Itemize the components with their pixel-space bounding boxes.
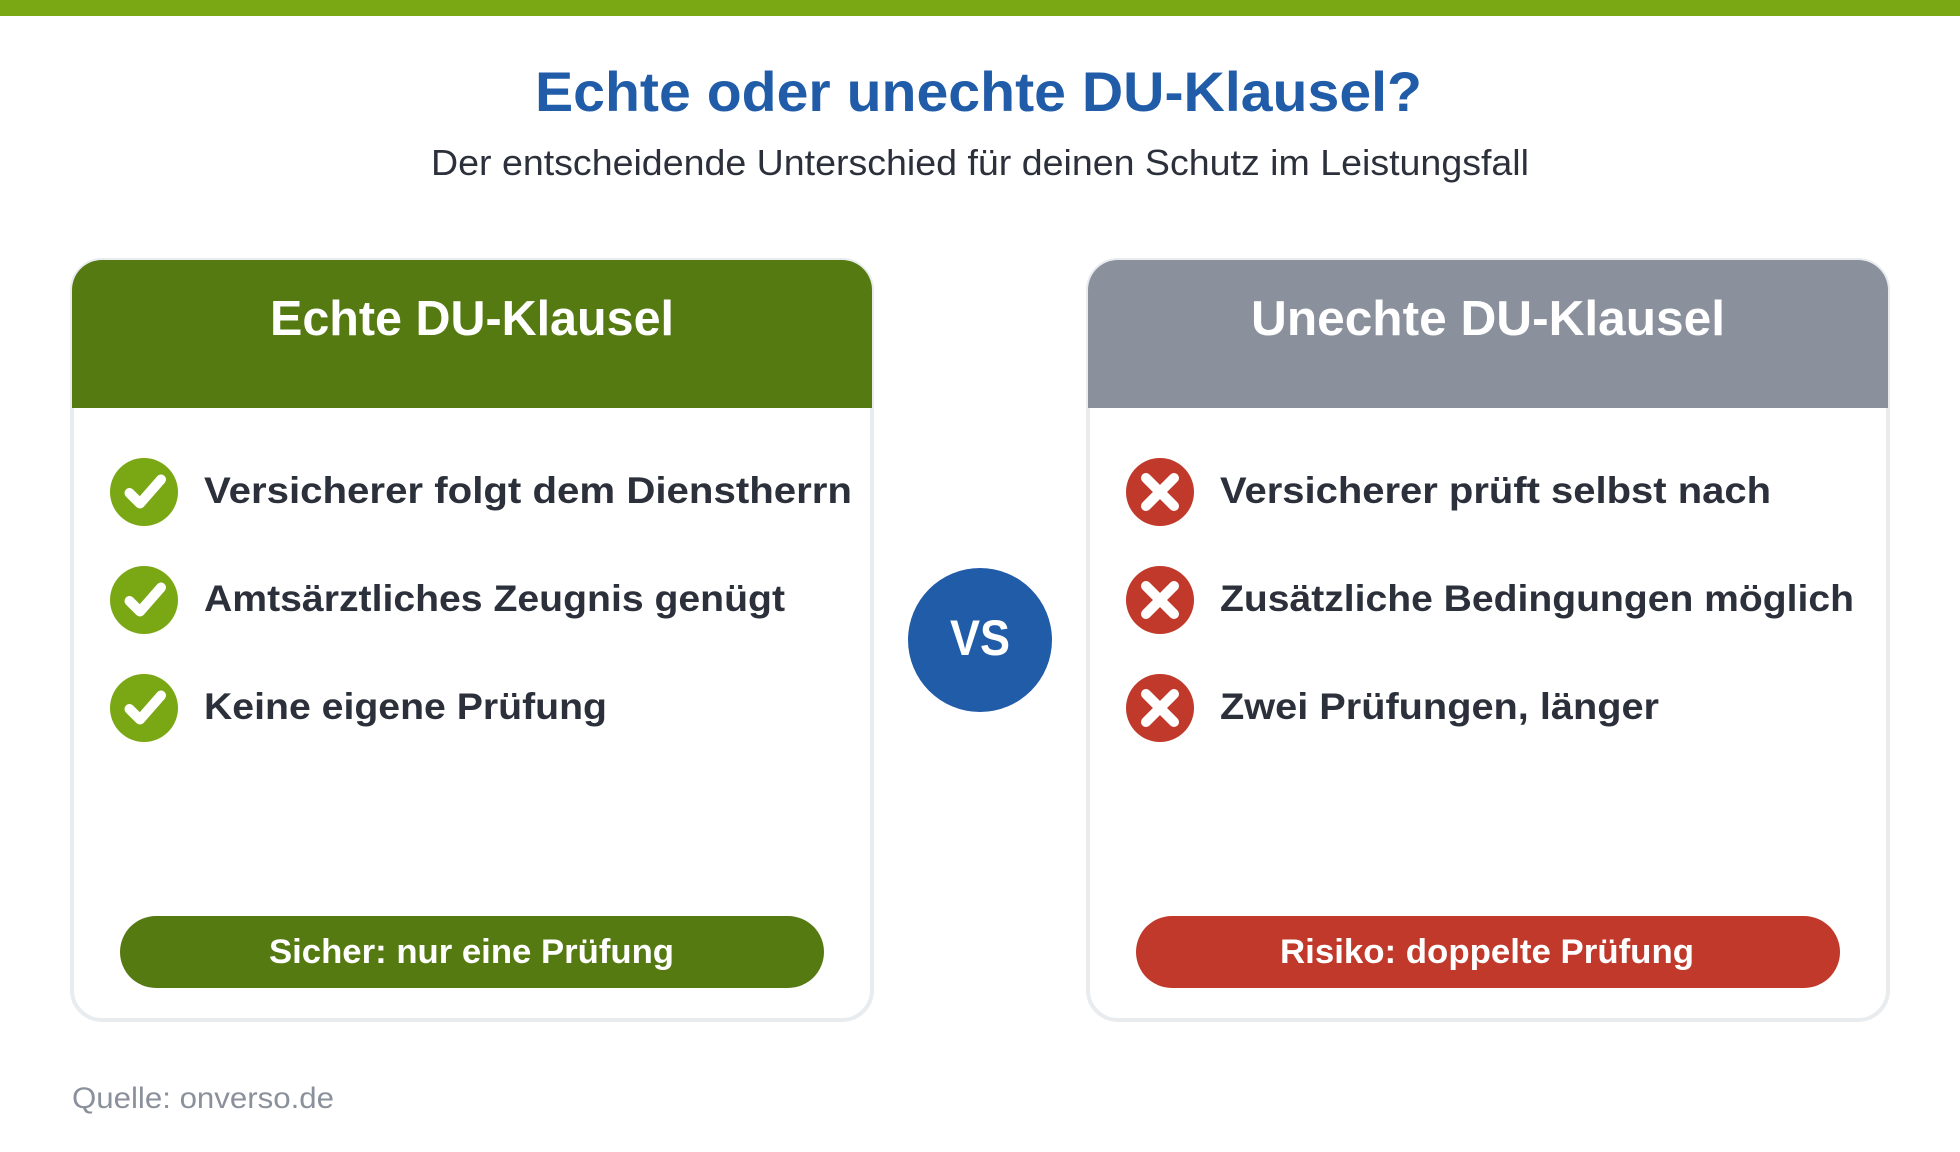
icon: cross bbox=[1126, 674, 1194, 742]
source note: Quelle: onverso.de bbox=[72, 1082, 334, 1115]
title: Echte oder unechte DU-Klausel? bbox=[535, 60, 1422, 123]
panel background bbox=[72, 260, 872, 1020]
panel background bbox=[1088, 260, 1888, 1020]
item 2 bbox=[1126, 566, 1854, 634]
item text: Amtsärztliches Zeugnis genügt bbox=[204, 578, 785, 619]
icon: check bbox=[110, 566, 178, 634]
panel heading: Unechte DU-Klausel bbox=[1251, 292, 1725, 346]
panel: Echte DU-Klausel bbox=[72, 260, 872, 1020]
verdict pill: safe bbox=[120, 916, 824, 988]
top accent bar bbox=[0, 0, 1960, 16]
verdict pill: risk bbox=[1136, 916, 1840, 988]
item text: Zwei Prüfungen, länger bbox=[1220, 686, 1659, 727]
icon: cross bbox=[1126, 458, 1194, 526]
item 1 bbox=[110, 458, 852, 526]
item text: Keine eigene Prüfung bbox=[204, 686, 607, 727]
icon: cross bbox=[1126, 566, 1194, 634]
item 1 bbox=[1126, 458, 1771, 526]
verdict pill: safe: Sicher: nur eine Prüfung bbox=[269, 933, 674, 971]
panel header: green bbox=[72, 260, 872, 408]
panel: Unechte DU-Klausel bbox=[1088, 260, 1888, 1020]
item text: Zusätzliche Bedingungen möglich bbox=[1220, 578, 1854, 619]
icon: check bbox=[110, 458, 178, 526]
icon: check bbox=[110, 674, 178, 742]
item text: Versicherer folgt dem Dienstherrn bbox=[204, 470, 852, 511]
item text: Versicherer prüft selbst nach bbox=[1220, 470, 1771, 511]
vs badge bbox=[908, 568, 1052, 712]
item 3 bbox=[110, 674, 607, 742]
vs badge: VS bbox=[950, 610, 1010, 666]
subtitle: Der entscheidende Unterschied für deinen Schutz im Leistungsfall bbox=[431, 142, 1529, 183]
item 3 bbox=[1126, 674, 1659, 742]
item 2 bbox=[110, 566, 785, 634]
panel heading: Echte DU-Klausel bbox=[270, 292, 674, 346]
panel header: grey bbox=[1088, 260, 1888, 408]
verdict pill: risk: Risiko: doppelte Prüfung bbox=[1280, 933, 1694, 971]
